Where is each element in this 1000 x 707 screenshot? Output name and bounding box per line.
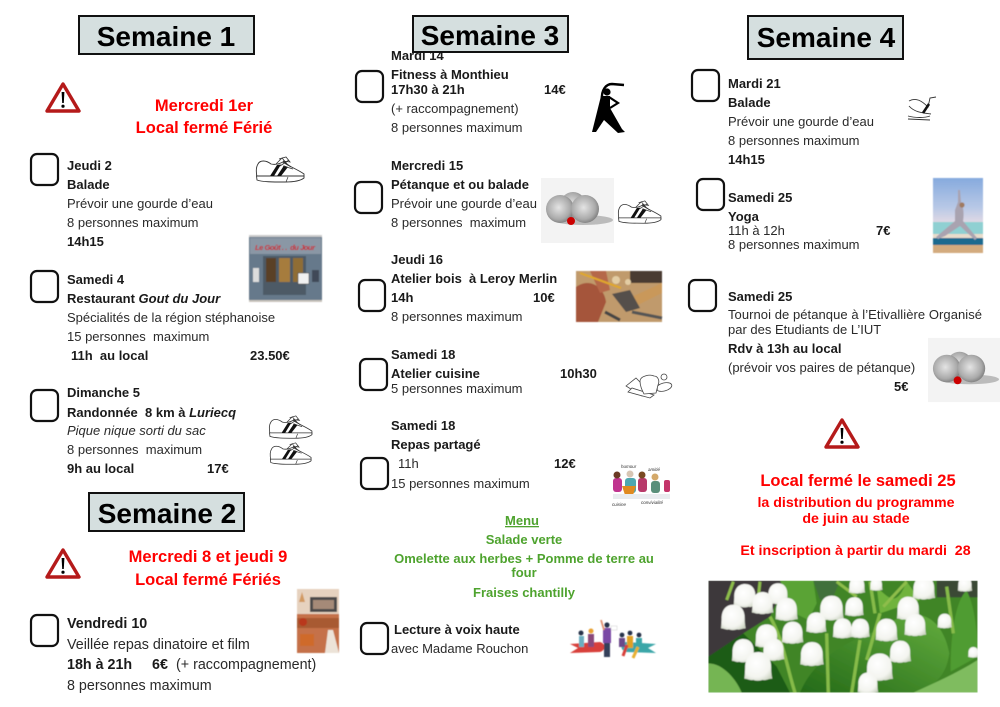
text block: Repas partagé: Repas partagé bbox=[391, 437, 481, 452]
text block: Mardi 14: 17h30 à 21h bbox=[391, 82, 465, 97]
text block: Repas partagé: 15 personnes maximum bbox=[391, 476, 530, 491]
text block: Mardi 14: (+ raccompagnement) bbox=[391, 101, 519, 116]
checkbox: Samedi 25 yoga bbox=[697, 179, 724, 210]
checkbox: Vendredi 10 bbox=[31, 615, 58, 646]
text block: Jeudi 16: Atelier bois à Leroy Merlin bbox=[391, 271, 557, 286]
text block: Dimanche 5: 9h au local bbox=[67, 461, 134, 476]
text block: Mercredi 15: 8 personnes maximum bbox=[391, 215, 526, 230]
callout: local fermé: Mercredi 1er bbox=[155, 97, 254, 115]
checkbox: Samedi 18 atelier cuisine bbox=[360, 359, 387, 390]
text block: Mercredi 15: Mercredi 15 bbox=[391, 158, 463, 173]
menu: Salade verte bbox=[486, 532, 562, 547]
text block: Atelier cuisine: 5 personnes maximum bbox=[391, 381, 522, 396]
photo: woodworking tools bbox=[576, 271, 662, 322]
heading: Semaine 4: Semaine 4 bbox=[757, 22, 896, 53]
illustration: reading group bbox=[570, 620, 656, 658]
text block: Tournoi de pétanque: par des Etudiants de L’IUT bbox=[728, 322, 881, 337]
illustration: shared meal bbox=[612, 464, 670, 507]
text block: Jeudi 2: Prévoir une gourde d’eau bbox=[67, 196, 213, 211]
checkbox: Samedi 25 tournoi bbox=[689, 280, 716, 311]
text block: Tournoi de pétanque: Rdv à 13h au local bbox=[728, 341, 841, 356]
text block: Mardi 21: Mardi 21 bbox=[728, 76, 781, 91]
text block: Jeudi 16: 14h bbox=[391, 290, 413, 305]
menu: four bbox=[511, 565, 537, 580]
text block: Tournoi de pétanque bbox=[728, 289, 982, 394]
text block: Vendredi 10: Veillée repas dinatoire et film bbox=[67, 637, 250, 653]
text block: Vendredi 10: (+ raccompagnement) bbox=[176, 657, 316, 673]
callout: local fermé samedi 25: la distribution du programme bbox=[757, 495, 955, 511]
checkbox: Mardi 14 bbox=[356, 71, 383, 102]
text block: Repas partagé: Samedi 18 bbox=[391, 418, 455, 433]
checkbox: Mardi 21 bbox=[692, 70, 719, 101]
panel: semaine 3 bbox=[355, 16, 673, 658]
text block: Yoga: Yoga bbox=[728, 209, 760, 224]
icon: cooking utensils bbox=[626, 374, 673, 398]
menu: Menu bbox=[505, 513, 539, 528]
icon: sneaker bbox=[618, 201, 661, 223]
text block: Jeudi 16: 10€ bbox=[533, 290, 555, 305]
text block: Atelier cuisine: 10h30 bbox=[560, 366, 597, 381]
text block: Repas partagé: 12€ bbox=[554, 456, 576, 471]
illustration: shared meal: cuisine bbox=[612, 502, 627, 507]
panel: semaine 1 bbox=[31, 16, 322, 476]
menu bbox=[394, 513, 654, 600]
text block: Mardi 14: Fitness à Monthieu bbox=[391, 67, 509, 82]
text block: Vendredi 10: 6€ bbox=[152, 657, 168, 673]
text block: Tournoi de pétanque: (prévoir vos paires de pétanque) bbox=[728, 360, 915, 375]
callout: local fermé fériés: Local fermé Fériés bbox=[135, 571, 281, 589]
text block: Dimanche 5: Randonnée 8 km à Luriecq bbox=[67, 405, 236, 420]
text block: Lecture à voix haute bbox=[391, 622, 528, 656]
icon: fitness silhouette bbox=[592, 84, 625, 133]
text block: Jeudi 16: 8 personnes maximum bbox=[391, 309, 522, 324]
heading: Semaine 2: Semaine 2 bbox=[98, 498, 236, 529]
checkbox: Mercredi 15 bbox=[355, 182, 382, 213]
menu: Omelette aux herbes + Pomme de terre au bbox=[394, 551, 654, 566]
photo: film evening bbox=[297, 589, 339, 653]
text block: Samedi 4: 11h au local bbox=[71, 348, 148, 363]
text block: Vendredi 10: 18h à 21h bbox=[67, 657, 132, 673]
text block: Tournoi de pétanque: Samedi 25 bbox=[728, 289, 792, 304]
icon: warning triangle bbox=[826, 420, 858, 447]
checkbox: Jeudi 2 bbox=[31, 154, 58, 185]
text block: Vendredi 10 bbox=[67, 616, 316, 694]
text block: Yoga: 7€ bbox=[876, 223, 890, 238]
text block: Tournoi de pétanque: 5€ bbox=[894, 379, 908, 394]
text block: Lecture à voix haute: Lecture à voix haute bbox=[394, 622, 520, 637]
text block: Dimanche 5: 8 personnes maximum bbox=[67, 442, 202, 457]
text block: Yoga: 11h à 12h bbox=[728, 223, 785, 238]
text block: Jeudi 2: 14h15 bbox=[67, 234, 104, 249]
text block: Atelier cuisine: Atelier cuisine bbox=[391, 366, 480, 381]
text block: Jeudi 16 bbox=[391, 252, 557, 324]
text block: Yoga: 8 personnes maximum bbox=[728, 237, 860, 252]
text block: Yoga bbox=[728, 190, 890, 252]
text block: Repas partagé: 11h bbox=[398, 456, 419, 471]
callout: local fermé samedi 25: Local fermé le samedi 25 bbox=[760, 472, 956, 490]
illustration: shared meal: humour bbox=[621, 464, 637, 469]
text block: Mardi 14: 14€ bbox=[544, 82, 566, 97]
callout: local fermé samedi 25: de juin au stade bbox=[802, 511, 910, 527]
callout: local fermé: Local fermé Férié bbox=[136, 119, 272, 137]
photo: lily of the valley bbox=[708, 577, 979, 694]
text block: Mercredi 15: Pétanque et ou balade bbox=[391, 177, 529, 192]
text block: Mardi 21: 8 personnes maximum bbox=[728, 133, 860, 148]
text block: Vendredi 10: 8 personnes maximum bbox=[67, 678, 212, 694]
text block: Vendredi 10: Vendredi 10 bbox=[67, 616, 147, 632]
icon: pétanque balls bbox=[541, 178, 614, 243]
checkbox: Samedi 4 bbox=[31, 271, 58, 302]
text block: Mardi 21: Prévoir une gourde d’eau bbox=[728, 114, 874, 129]
text block: Jeudi 2 bbox=[67, 158, 213, 249]
text block: Atelier cuisine: Samedi 18 bbox=[391, 347, 455, 362]
text block: Samedi 4: Spécialités de la région stéphanoise bbox=[67, 310, 275, 325]
text block: Samedi 4 bbox=[67, 272, 290, 363]
text block: Atelier cuisine bbox=[391, 347, 597, 396]
text block: Mardi 21: Balade bbox=[728, 95, 771, 110]
icon: warning triangle bbox=[47, 84, 79, 111]
text block: Dimanche 5: 17€ bbox=[207, 461, 229, 476]
text block: Mercredi 15: Prévoir une gourde d’eau bbox=[391, 196, 537, 211]
text block: Mercredi 15 bbox=[391, 158, 537, 230]
text block: Jeudi 2: 8 personnes maximum bbox=[67, 215, 198, 230]
text block: Samedi 4: Samedi 4 bbox=[67, 272, 125, 287]
text block: Samedi 4: 15 personnes maximum bbox=[67, 329, 209, 344]
text block: Tournoi de pétanque: Tournoi de pétanque à l’Etivallière Organisé bbox=[728, 307, 982, 322]
text block: Jeudi 16: Jeudi 16 bbox=[391, 252, 443, 267]
menu: Fraises chantilly bbox=[473, 585, 576, 600]
icon: two sneakers bbox=[269, 416, 312, 464]
text block: Repas partagé bbox=[391, 418, 576, 491]
icon: warning triangle bbox=[47, 550, 79, 577]
heading: Semaine 1 bbox=[79, 16, 254, 54]
photo: yoga on beach bbox=[933, 178, 983, 253]
text block: Lecture à voix haute: avec Madame Rouchon bbox=[391, 641, 528, 656]
text block: Yoga: Samedi 25 bbox=[728, 190, 792, 205]
text block: Mardi 21: 14h15 bbox=[728, 152, 765, 167]
callout: local fermé fériés bbox=[129, 548, 287, 589]
illustration: shared meal: amitié bbox=[648, 467, 661, 472]
heading: Semaine 1: Semaine 1 bbox=[97, 21, 235, 52]
panel: semaine 4 bbox=[689, 16, 1000, 694]
heading: Semaine 4 bbox=[748, 16, 903, 59]
icon: sneaker bbox=[256, 157, 304, 182]
text block: Dimanche 5 bbox=[67, 385, 236, 476]
text block: Mardi 14: 8 personnes maximum bbox=[391, 120, 522, 135]
text block: Jeudi 2: Jeudi 2 bbox=[67, 158, 112, 173]
text block: Mardi 14 bbox=[391, 48, 566, 135]
text block: Dimanche 5: Dimanche 5 bbox=[67, 385, 140, 400]
photo: restaurant facade: Le Goût . . du Jour bbox=[255, 243, 316, 252]
icon: cropped sneaker bbox=[908, 97, 936, 120]
callout: local fermé samedi 25 bbox=[740, 472, 971, 559]
illustration: shared meal: convivialité bbox=[641, 500, 664, 505]
text block: Mardi 21 bbox=[728, 76, 874, 167]
photo: restaurant facade bbox=[249, 235, 322, 302]
checkbox: Lecture bbox=[361, 623, 388, 654]
text block: Dimanche 5: Pique nique sorti du sac bbox=[67, 423, 206, 438]
text block: Jeudi 2: Balade bbox=[67, 177, 110, 192]
text block: Samedi 4: Restaurant Gout du Jour bbox=[67, 291, 221, 306]
callout: local fermé fériés: Mercredi 8 et jeudi 9 bbox=[129, 548, 287, 566]
checkbox: Jeudi 16 bbox=[359, 280, 385, 311]
text block: Samedi 4: 23.50€ bbox=[250, 348, 290, 363]
checkbox: Samedi 18 repas partagé bbox=[361, 458, 388, 489]
icon: pétanque balls bbox=[928, 338, 1000, 402]
callout: local fermé bbox=[136, 97, 272, 137]
heading: Semaine 3: Semaine 3 bbox=[421, 20, 559, 51]
panel: semaine 2 bbox=[31, 493, 339, 694]
checkbox: Dimanche 5 bbox=[31, 390, 58, 421]
text block: Mardi 14: Mardi 14 bbox=[391, 48, 445, 63]
callout: local fermé samedi 25: Et inscription à partir du mardi 28 bbox=[740, 543, 971, 559]
